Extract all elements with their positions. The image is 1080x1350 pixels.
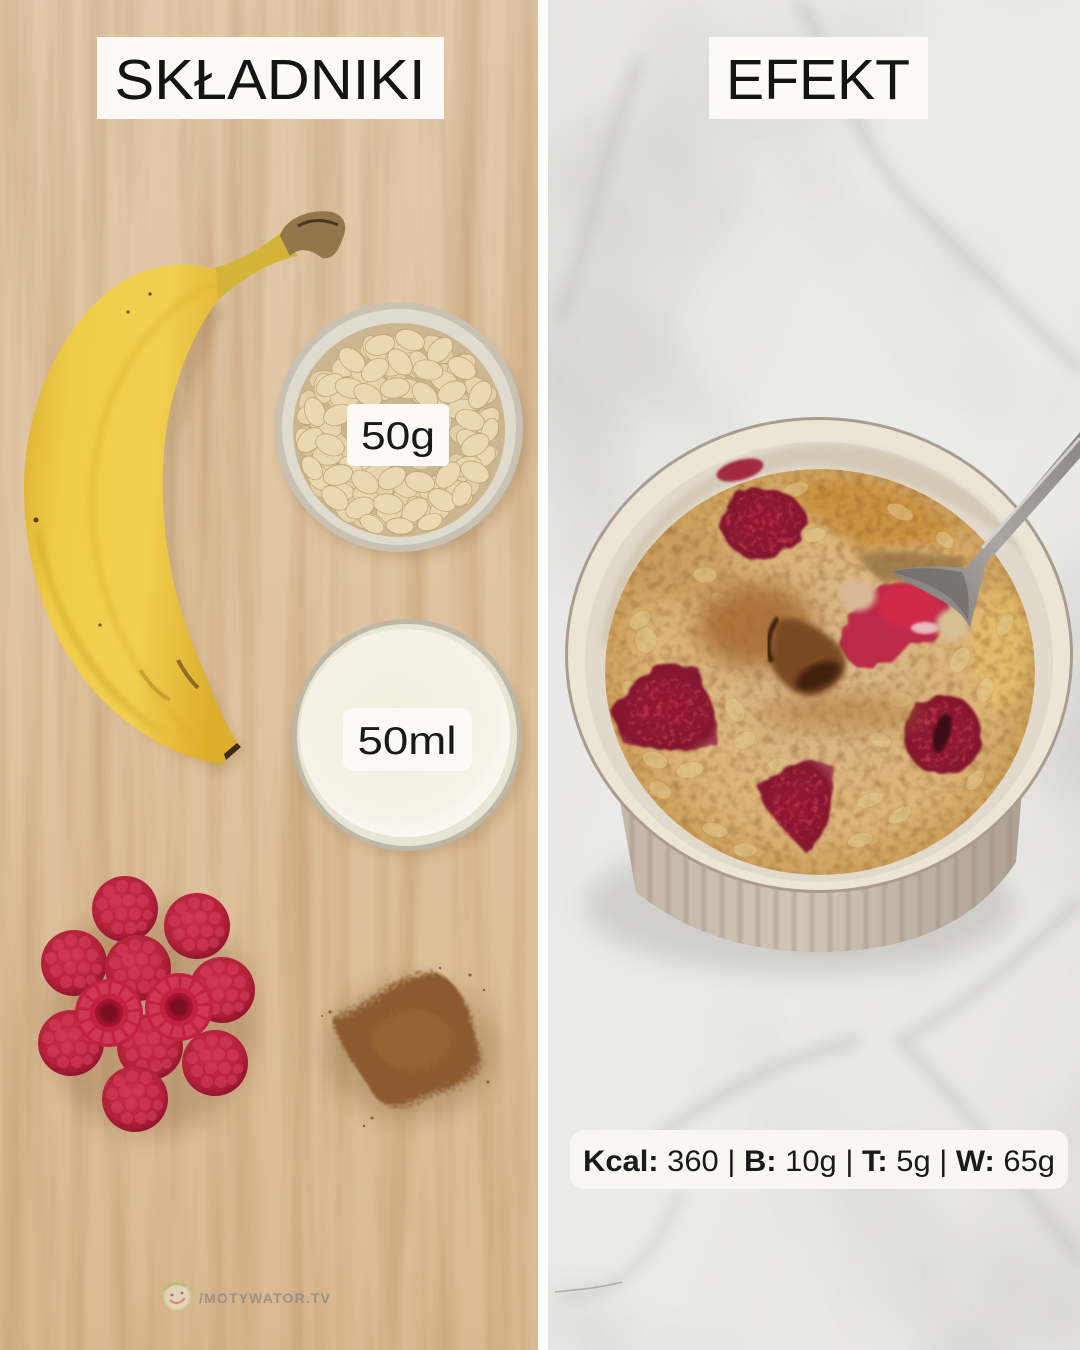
icon: bowl of oats xyxy=(275,302,530,562)
watermark: motywator.tv xyxy=(164,1284,331,1310)
heading: SKŁADNIKI xyxy=(97,37,444,119)
oat flakes on cake xyxy=(619,479,1017,857)
icon: cinnamon powder xyxy=(321,967,495,1127)
label: 50ml xyxy=(343,708,472,771)
baked oatmeal cake xyxy=(605,469,1035,875)
ramekin rim xyxy=(565,417,1073,893)
panel: ingredients on wood xyxy=(0,0,545,1350)
cinnamon dusting xyxy=(697,583,920,730)
label: 50g: 50g xyxy=(361,415,435,458)
icon: raspberries xyxy=(38,876,255,1135)
icon: ramekin with baked oatmeal xyxy=(565,417,1080,975)
icon: glass of milk xyxy=(292,619,528,857)
label: 50g xyxy=(347,404,449,466)
label: 50ml: 50ml xyxy=(358,720,456,763)
heading: SKŁADNIKI: SKŁADNIKI xyxy=(114,48,426,112)
nutrition label xyxy=(570,1130,1068,1189)
heading: EFEKT: EFEKT xyxy=(726,48,910,112)
panel: result on marble xyxy=(548,0,1080,1350)
nutrition label: Kcal: 360 | B: 10g | T: 5g | W: 65g xyxy=(583,1145,1055,1178)
spoon xyxy=(890,432,1080,628)
watermark: motywator.tv: /MOTYWATOR.TV xyxy=(199,1290,331,1306)
heading: EFEKT xyxy=(709,37,928,119)
raspberries in cake xyxy=(612,487,981,852)
ramekin fluted body xyxy=(620,798,1022,952)
icon: banana xyxy=(24,211,345,772)
